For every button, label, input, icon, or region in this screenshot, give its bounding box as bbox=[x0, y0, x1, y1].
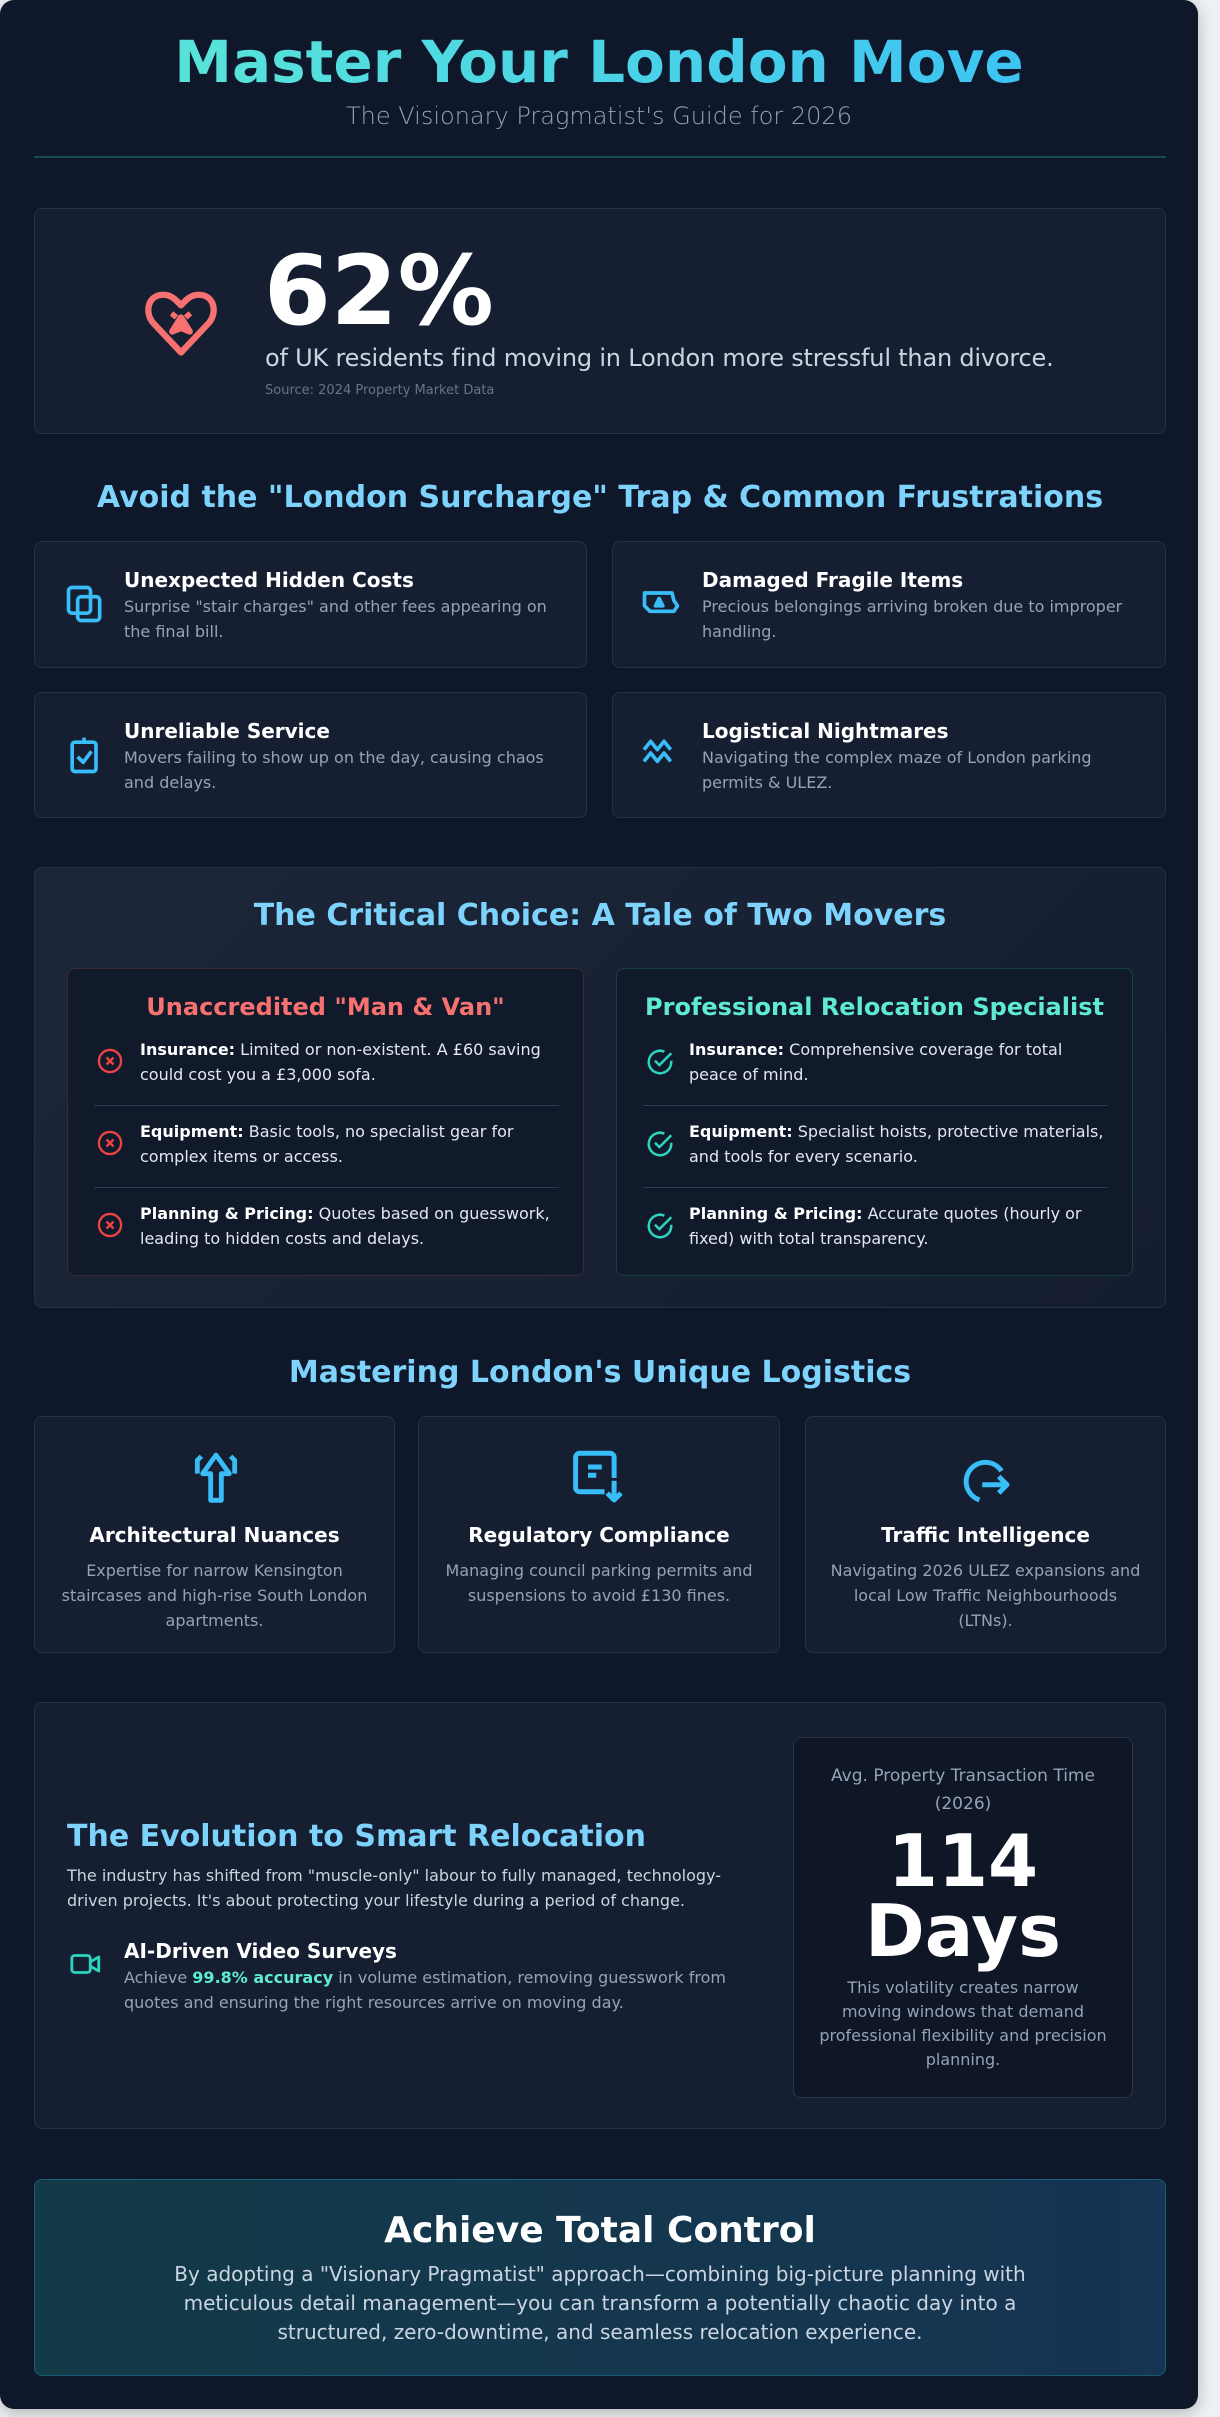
panel: traffic: Navigating 2026 ULEZ expansions and local Low Traffic Neighbourhoods (LTNs). bbox=[831, 1561, 1140, 1630]
panel: man & van bbox=[67, 968, 584, 1276]
icon: clipboard check bbox=[70, 738, 98, 774]
panel: regulatory bbox=[418, 1416, 780, 1653]
panel: unreliable service bbox=[34, 692, 587, 818]
panel: regulatory: Regulatory Compliance bbox=[468, 1523, 730, 1547]
source: Source: 2024 Property Market Data bbox=[265, 383, 494, 398]
panel: regulatory: Managing council parking permits and suspensions to avoid £130 fines. bbox=[446, 1561, 752, 1605]
panel: hidden costs: Surprise "stair charges" and other fees appearing on the final bill. bbox=[124, 597, 547, 641]
panel: stat 62% bbox=[34, 208, 1166, 434]
panel: unreliable service: Movers failing to show up on the day, causing chaos and delays. bbox=[124, 748, 544, 792]
feature: AI video: Achieve 99.8% accuracy in volume estimation, removing guesswork from quotes and ensuring the right resources arrive on moving day. bbox=[124, 1968, 726, 2012]
item: equipment pro: Equipment: Specialist hoists, protective materials, and tools for every scenario. bbox=[689, 1122, 1103, 1166]
panel: call to action bbox=[34, 2179, 1166, 2376]
item: insurance pro: Insurance: Comprehensive coverage for total peace of mind. bbox=[689, 1040, 1062, 1084]
text: cta body: By adopting a "Visionary Pragmatist" approach—combining big-picture planning with meticulous detail management—you can transform a potentially chaotic day into a structured, zero-downtime, and seamless relocation experience. bbox=[174, 2262, 1026, 2344]
text: evolution body: The industry has shifted from "muscle-only" labour to fully managed, technology-driven projects. It's about protecting your lifestyle during a period of change. bbox=[67, 1866, 721, 1910]
icon: copy bbox=[66, 586, 102, 622]
panel: damaged items bbox=[612, 541, 1166, 668]
heading: logistics: Mastering London's Unique Logistics bbox=[289, 1355, 911, 1390]
heading: critical choice: The Critical Choice: A Tale of Two Movers bbox=[254, 898, 946, 933]
stat number: 62% bbox=[264, 235, 494, 347]
subtitle: The Visionary Pragmatist's Guide for 2026 bbox=[346, 102, 852, 130]
icon: circular arrow bbox=[964, 1460, 1010, 1502]
icon: document download bbox=[573, 1450, 623, 1502]
title bbox=[0, 26, 1198, 98]
stat box: 114 days: Avg. Property Transaction Time (2026) bbox=[831, 1766, 1095, 1814]
panel: unreliable service: Unreliable Service bbox=[124, 719, 330, 743]
icon: up arrow bbox=[194, 1452, 238, 1503]
panel: damaged items: Damaged Fragile Items bbox=[702, 568, 963, 592]
stat box: 114 days: 114 bbox=[888, 1819, 1038, 1903]
panel: logistical nightmares: Logistical Nightmares bbox=[702, 719, 949, 743]
icon: video camera bbox=[70, 1954, 100, 1974]
panel: architectural: Architectural Nuances bbox=[89, 1523, 340, 1547]
stat box: 114 days: Days bbox=[865, 1889, 1061, 1973]
heading: achieve: Achieve Total Control bbox=[384, 2210, 816, 2251]
item: equipment: Equipment: Basic tools, no specialist gear for complex items or access. bbox=[140, 1122, 513, 1166]
panel: hidden costs bbox=[34, 541, 587, 668]
feature: AI video bbox=[70, 1939, 726, 2012]
panel: damaged items: Precious belongings arriving broken due to improper handling. bbox=[702, 597, 1122, 641]
stat box: 114 days bbox=[793, 1737, 1133, 2098]
panel: critical choice bbox=[34, 867, 1166, 1308]
panel: traffic bbox=[805, 1416, 1166, 1653]
icon: heart bbox=[145, 292, 217, 356]
panel: man & van: Unaccredited "Man & Van" bbox=[146, 993, 505, 1021]
icon: fragile box bbox=[642, 591, 680, 614]
stat text: of UK residents find moving in London more stressful than divorce. bbox=[265, 344, 1054, 372]
panel: architectural bbox=[34, 1416, 395, 1653]
panel: logistical nightmares: Navigating the complex maze of London parking permits & ULEZ. bbox=[702, 748, 1092, 792]
panel: professional bbox=[616, 968, 1133, 1276]
item: insurance: Insurance: Limited or non-existent. A £60 saving could cost you a £3,000 sofa. bbox=[140, 1040, 541, 1084]
panel: professional: Professional Relocation Specialist bbox=[645, 993, 1104, 1021]
icon: waves bbox=[642, 739, 672, 764]
stat box: 114 days: This volatility creates narrow moving windows that demand professional flexibility and precision planning. bbox=[819, 1978, 1107, 2069]
panel: architectural: Expertise for narrow Kensington staircases and high-rise South London apartments. bbox=[62, 1561, 367, 1630]
item: planning: Planning & Pricing: Quotes based on guesswork, leading to hidden costs and delays. bbox=[140, 1204, 550, 1248]
heading: evolution: The Evolution to Smart Relocation bbox=[67, 1819, 646, 1854]
heading: frustrations: Avoid the "London Surcharge" Trap & Common Frustrations bbox=[97, 480, 1103, 515]
title: Master Your London Move bbox=[174, 28, 1024, 96]
panel: hidden costs: Unexpected Hidden Costs bbox=[124, 568, 414, 592]
panel: evolution bbox=[34, 1702, 1166, 2129]
panel: logistical nightmares bbox=[612, 692, 1166, 818]
feature: AI video: AI-Driven Video Surveys bbox=[124, 1939, 397, 1963]
item: planning pro: Planning & Pricing: Accurate quotes (hourly or fixed) with total transparency. bbox=[689, 1204, 1081, 1248]
panel: traffic: Traffic Intelligence bbox=[881, 1523, 1090, 1547]
